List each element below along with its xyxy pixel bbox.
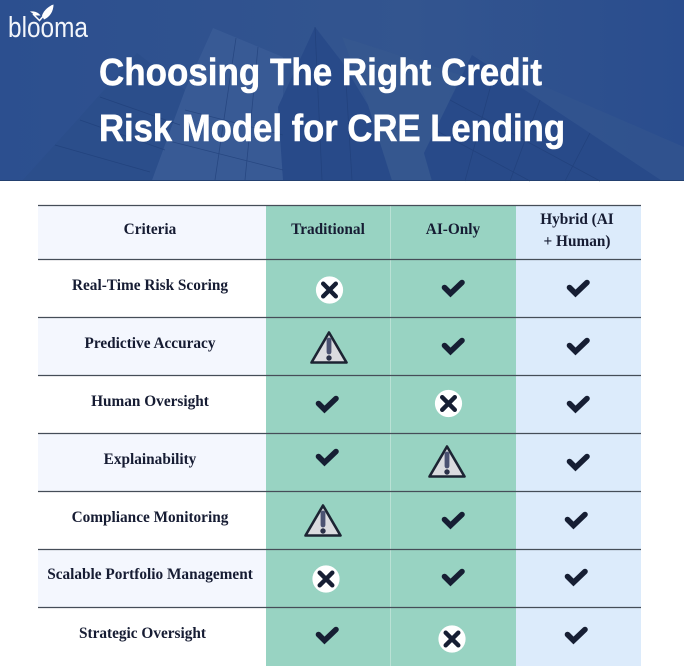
criteria labels: Strategic Oversight <box>79 625 207 642</box>
building: centre dark tower <box>278 27 392 180</box>
header labels: Traditional <box>291 221 365 238</box>
icon: leaf check <box>30 4 54 20</box>
criteria labels <box>47 277 254 642</box>
building: left dark block <box>23 53 185 180</box>
header labels: Hybrid (AI <box>540 211 614 228</box>
header labels: + Human) <box>544 233 610 250</box>
criteria labels: Compliance Monitoring <box>72 509 229 526</box>
window grid lines <box>55 27 600 181</box>
title <box>99 52 565 150</box>
banner bottom edge <box>0 180 684 181</box>
row icons: Predictive Accuracy <box>312 332 587 362</box>
column: criteria shading <box>38 205 266 608</box>
header labels: AI-Only <box>426 221 481 238</box>
row icons: Real-Time Risk Scoring <box>316 276 587 304</box>
row icons: Human Oversight <box>318 390 587 417</box>
building: pale wedge beside centre tower <box>342 37 470 181</box>
criteria labels: Real-Time Risk Scoring <box>72 277 228 294</box>
criteria labels: Scalable Portfolio Management <box>47 566 254 583</box>
header banner with building photo <box>0 0 684 181</box>
column: hybrid fill <box>516 205 641 666</box>
criteria labels: Human Oversight <box>91 393 210 410</box>
criteria labels: Explainability <box>104 451 197 468</box>
column: traditional and AI-only fill <box>266 205 516 666</box>
building: left pale tower <box>152 28 283 180</box>
logo: blooma: blooma <box>8 12 88 44</box>
header labels: Criteria <box>124 221 177 238</box>
header labels <box>124 211 614 250</box>
comparison table <box>38 205 641 666</box>
row icons: Explainability <box>318 446 587 476</box>
row icons: Compliance Monitoring <box>306 506 585 536</box>
title: Risk Model for CRE Lending <box>99 108 565 150</box>
row icons: Scalable Portfolio Management <box>312 565 585 593</box>
building: right glass tower <box>424 55 662 181</box>
row icons: Strategic Oversight <box>318 625 585 653</box>
title: Choosing The Right Credit <box>99 52 542 94</box>
building: pale roof wedge <box>472 55 684 181</box>
criteria labels: Predictive Accuracy <box>85 335 216 352</box>
